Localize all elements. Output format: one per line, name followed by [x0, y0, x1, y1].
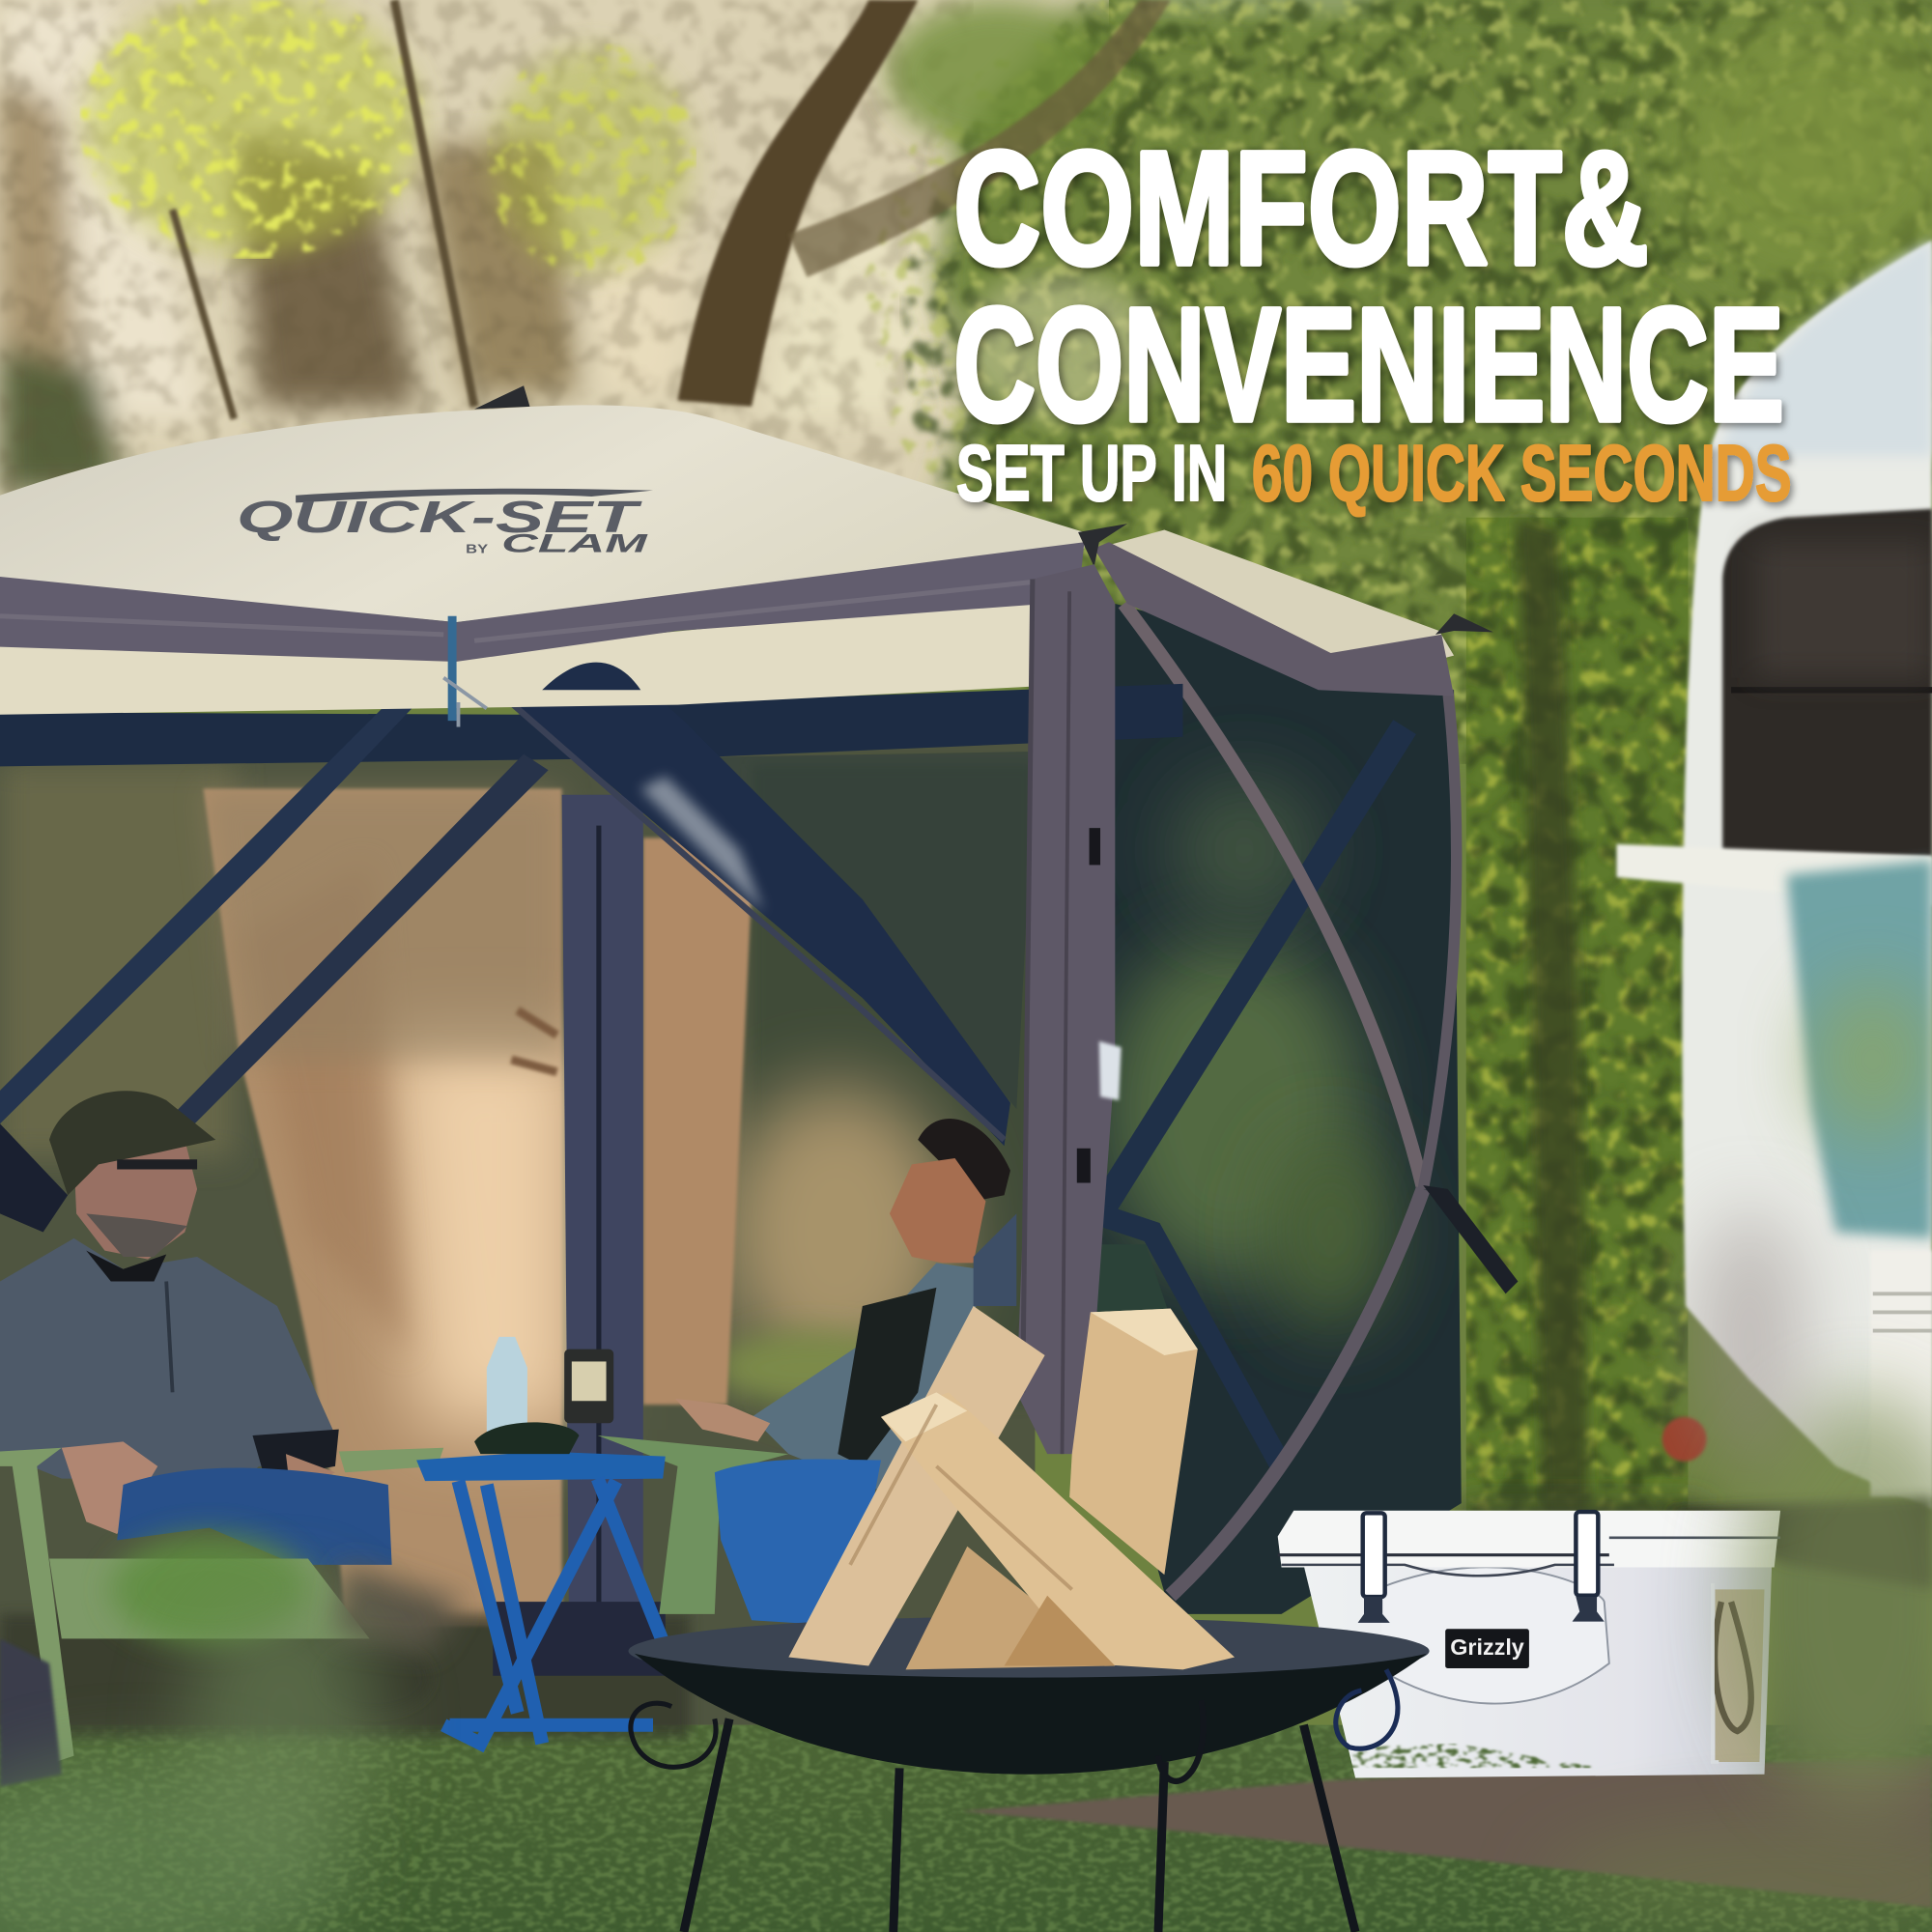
ground: grass and gravel path — [0, 1552, 1932, 1932]
tent: right mesh panel — [1091, 604, 1518, 1614]
roof peak hardware and ties — [474, 385, 529, 409]
background behind the tent mesh: big trunk and forest — [0, 739, 1035, 1725]
tent logo — [237, 489, 653, 557]
lantern — [564, 1350, 613, 1423]
man in cap — [0, 1091, 392, 1565]
subheading: SET UP IN — [956, 428, 1227, 518]
pit bowl — [635, 1654, 1427, 1775]
back post — [562, 795, 643, 1658]
boots — [321, 1644, 431, 1713]
woman — [675, 1119, 1016, 1627]
cooler — [1278, 1511, 1780, 1778]
water bottle — [487, 1337, 527, 1435]
tent logo: QUICK-SET — [237, 492, 643, 542]
right panel border strap — [1123, 604, 1423, 1189]
folding table — [416, 1452, 671, 1744]
people at the table — [0, 1091, 1016, 1786]
tent logo: CLAM — [501, 528, 648, 557]
pit legs — [631, 1669, 1398, 1932]
tent: left mesh, back post and navy panels — [0, 663, 1182, 1676]
black pull strap — [1423, 1185, 1518, 1293]
headline — [953, 119, 1792, 518]
RV camper trailer — [1616, 241, 1932, 1589]
cooler brand label — [1445, 1629, 1529, 1668]
green chairs — [0, 1448, 443, 1762]
fire pit with logs — [629, 1306, 1430, 1932]
stacked firewood — [788, 1306, 1235, 1669]
subheading — [956, 428, 1792, 518]
backpack — [0, 1638, 62, 1786]
tent: front corner post — [1016, 564, 1122, 1454]
cooler brand label: Grizzly — [1450, 1634, 1524, 1660]
tail light — [1662, 1417, 1707, 1462]
foreground blurred foliage — [0, 980, 1932, 1932]
valance — [0, 542, 1084, 662]
headline line 1: COMFORT& — [953, 119, 1649, 298]
cooler latches — [1363, 1512, 1598, 1597]
tent logo: BY — [466, 542, 489, 556]
shelf on the RV — [1616, 844, 1932, 906]
binoculars — [474, 1422, 579, 1454]
teal towel — [1786, 860, 1932, 1238]
pit rim — [629, 1616, 1430, 1686]
tent: roof — [0, 385, 1493, 727]
